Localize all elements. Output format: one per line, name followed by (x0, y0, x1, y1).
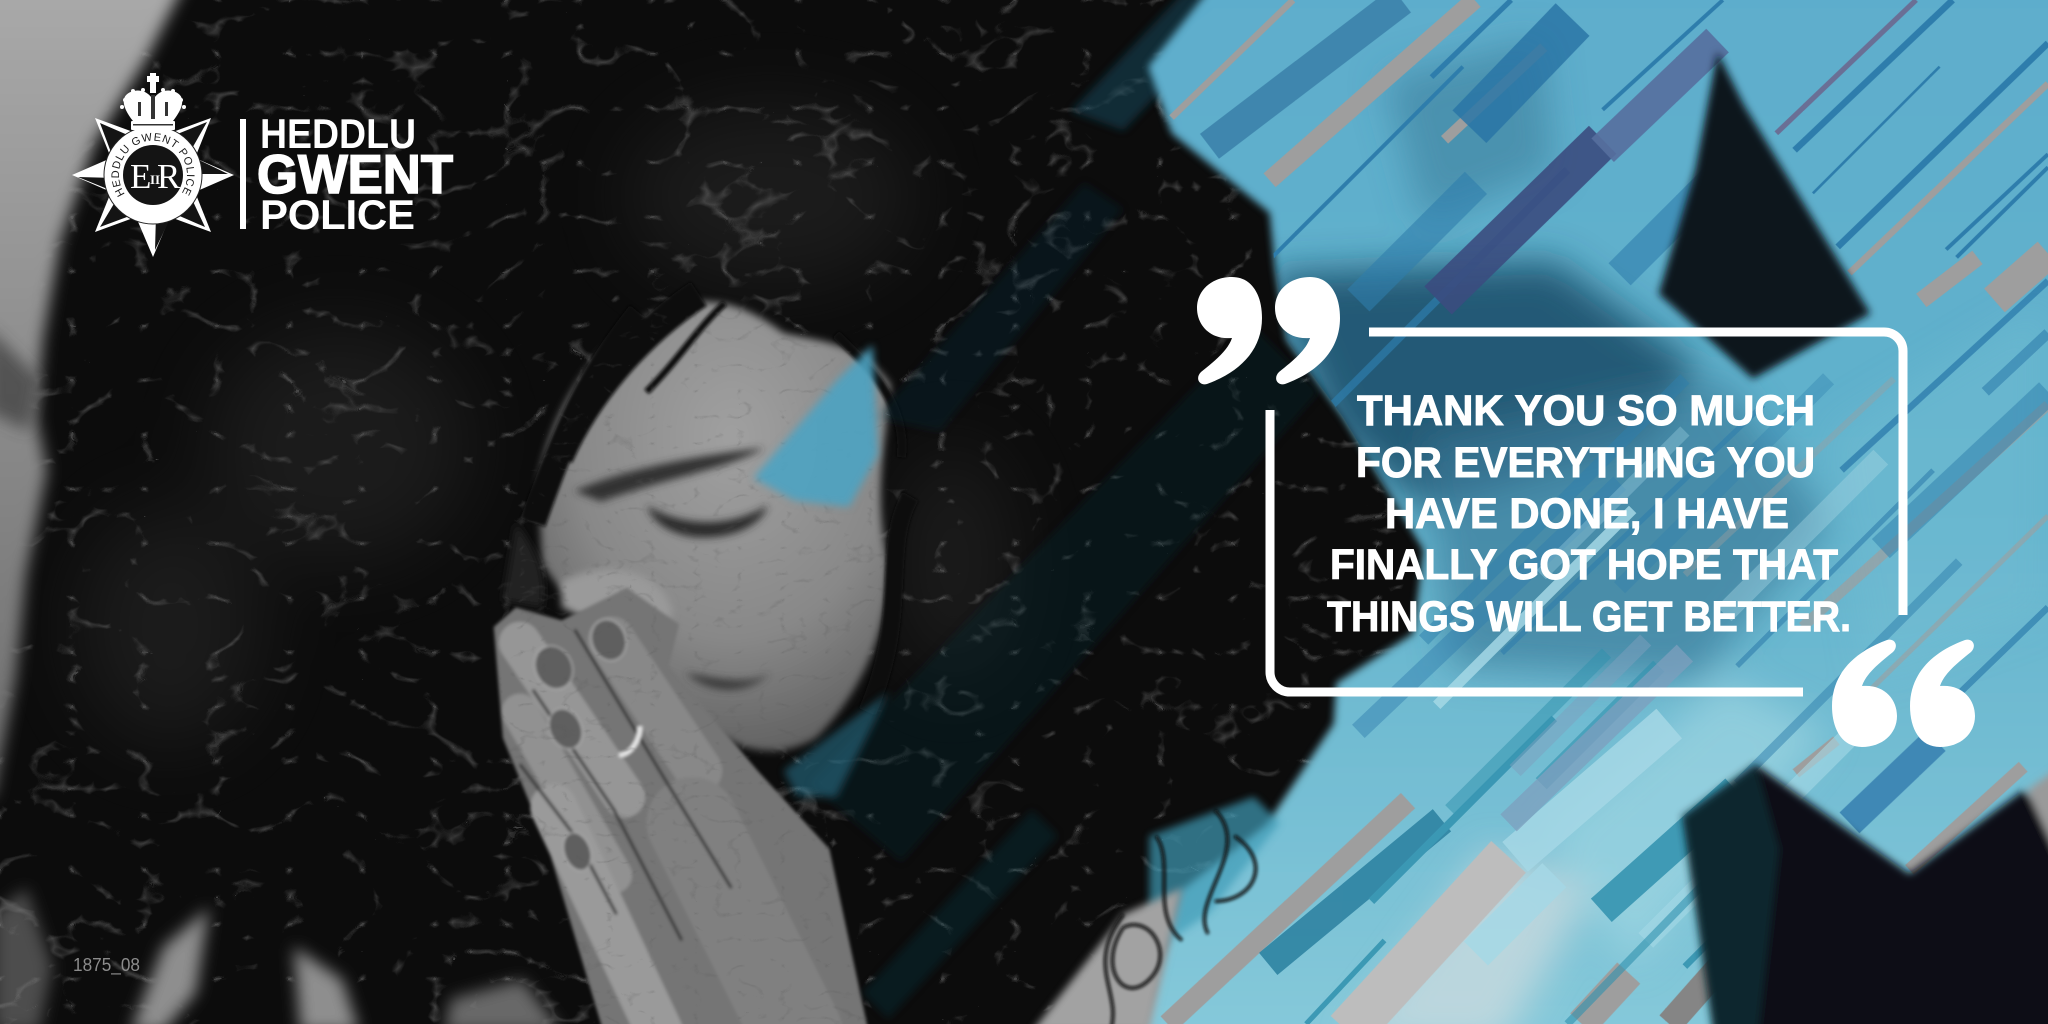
soft shadows in the blue photo (1267, 39, 2048, 1024)
quote text (1327, 387, 1851, 641)
dark tie and jacket shapes (1659, 52, 2048, 1024)
crest crown (120, 73, 186, 130)
crest star (72, 95, 234, 257)
closing quotation marks top-left (1197, 277, 1340, 384)
quote text: HAVE DONE, I HAVE (1385, 490, 1789, 538)
quote frame (1270, 332, 1903, 692)
opening quotation marks bottom-right (1832, 640, 1975, 747)
crest cipher: E (130, 157, 151, 196)
curls over lower blue area (1032, 797, 1280, 1024)
logo divider (240, 119, 246, 229)
grey wall top-left (0, 0, 189, 797)
quote text: THANK YOU SO MUCH (1357, 387, 1815, 435)
logo: Heddlu Gwent Police (72, 73, 454, 257)
crest cipher: II (150, 172, 160, 187)
crest cipher (130, 157, 181, 196)
quote text: FOR EVERYTHING YOU (1356, 439, 1815, 487)
logo word: HEDDLU: HEDDLU (260, 110, 416, 157)
quote text: THINGS WILL GET BETTER. (1327, 593, 1851, 641)
logo word: POLICE: POLICE (260, 191, 418, 238)
hair over forehead (533, 294, 910, 712)
teal patches over hair (754, 0, 1319, 1019)
reference code: 1875_08 (73, 955, 140, 976)
blue stripe area (1136, 0, 2048, 1024)
crest ring text: HEDDLU GWENT POLICE (111, 132, 195, 197)
crest cipher: R (157, 157, 181, 196)
logo word: GWENT: GWENT (257, 143, 453, 205)
clipped photo detail and diagonal stripes (1168, 0, 2048, 1024)
hands (494, 588, 869, 1024)
quote text: FINALLY GOT HOPE THAT (1330, 541, 1838, 589)
face (538, 302, 891, 751)
